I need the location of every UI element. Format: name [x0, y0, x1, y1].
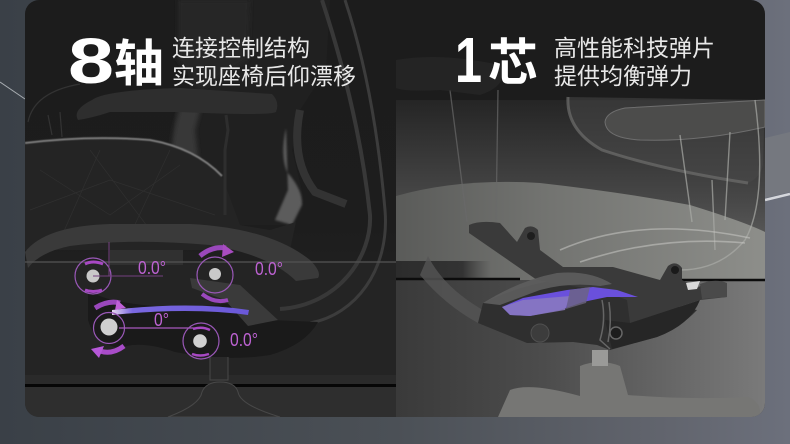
angle labels: 0.0°: [230, 330, 258, 350]
horizon line: [396, 279, 765, 280]
dark wall band: [396, 261, 486, 278]
heading: 8 axis: [70, 38, 162, 86]
upper wall: [396, 100, 765, 232]
upper mechanism arm: [469, 222, 727, 323]
pivot: lower left: [91, 300, 205, 358]
text: 1 core description: [554, 35, 715, 89]
purple spring: [502, 287, 638, 316]
base and gas lift: [498, 350, 760, 417]
text: 1 core description: 高性能科技弹片: [554, 35, 715, 61]
wireframe seat cushion: [25, 136, 294, 230]
horizon line: [25, 261, 396, 263]
angle labels: 0.0°: [255, 259, 283, 279]
angle labels: 0°: [154, 310, 169, 330]
background light streaks: [0, 82, 790, 200]
lower mechanism body: [478, 280, 700, 350]
text: 8 axis description: 实现座椅后仰漂移: [172, 63, 356, 89]
purple spring bar: [112, 306, 249, 315]
angle labels: 0.0°: [138, 258, 166, 278]
transparent backrest: [450, 90, 765, 270]
wireframe backrest: [172, 0, 303, 224]
pivot: top right: [197, 244, 234, 301]
transparent armrest: [450, 90, 451, 92]
floor: [25, 262, 396, 384]
text: 8 axis description: 连接控制结构: [172, 35, 310, 61]
text: 8 axis description: [172, 35, 356, 89]
pivot: top left: [75, 242, 163, 294]
pivot: lower right: [183, 323, 219, 359]
heading: 1 core: [458, 37, 536, 84]
lower floor: [396, 280, 765, 417]
lower mechanism: [88, 278, 318, 417]
transparent back frame: [280, 0, 385, 323]
upper bracket: [110, 250, 183, 265]
wireframe armrest: [28, 84, 277, 215]
heading: 8 axis: 8: [68, 25, 114, 97]
heading: 8 axis: 轴: [114, 36, 164, 92]
angle labels: [138, 258, 283, 350]
heading: 1 core: 1: [455, 24, 482, 96]
translucent shell: [420, 257, 482, 323]
panel: 8-axis wireframe chair: [25, 0, 396, 417]
panel: 1-core spring chair: [396, 57, 765, 417]
seat shell: [25, 224, 319, 281]
text: 1 core description: 提供均衡弹力: [554, 63, 692, 89]
heading: 1 core: 芯: [488, 35, 538, 91]
seat cushion: [396, 182, 765, 280]
